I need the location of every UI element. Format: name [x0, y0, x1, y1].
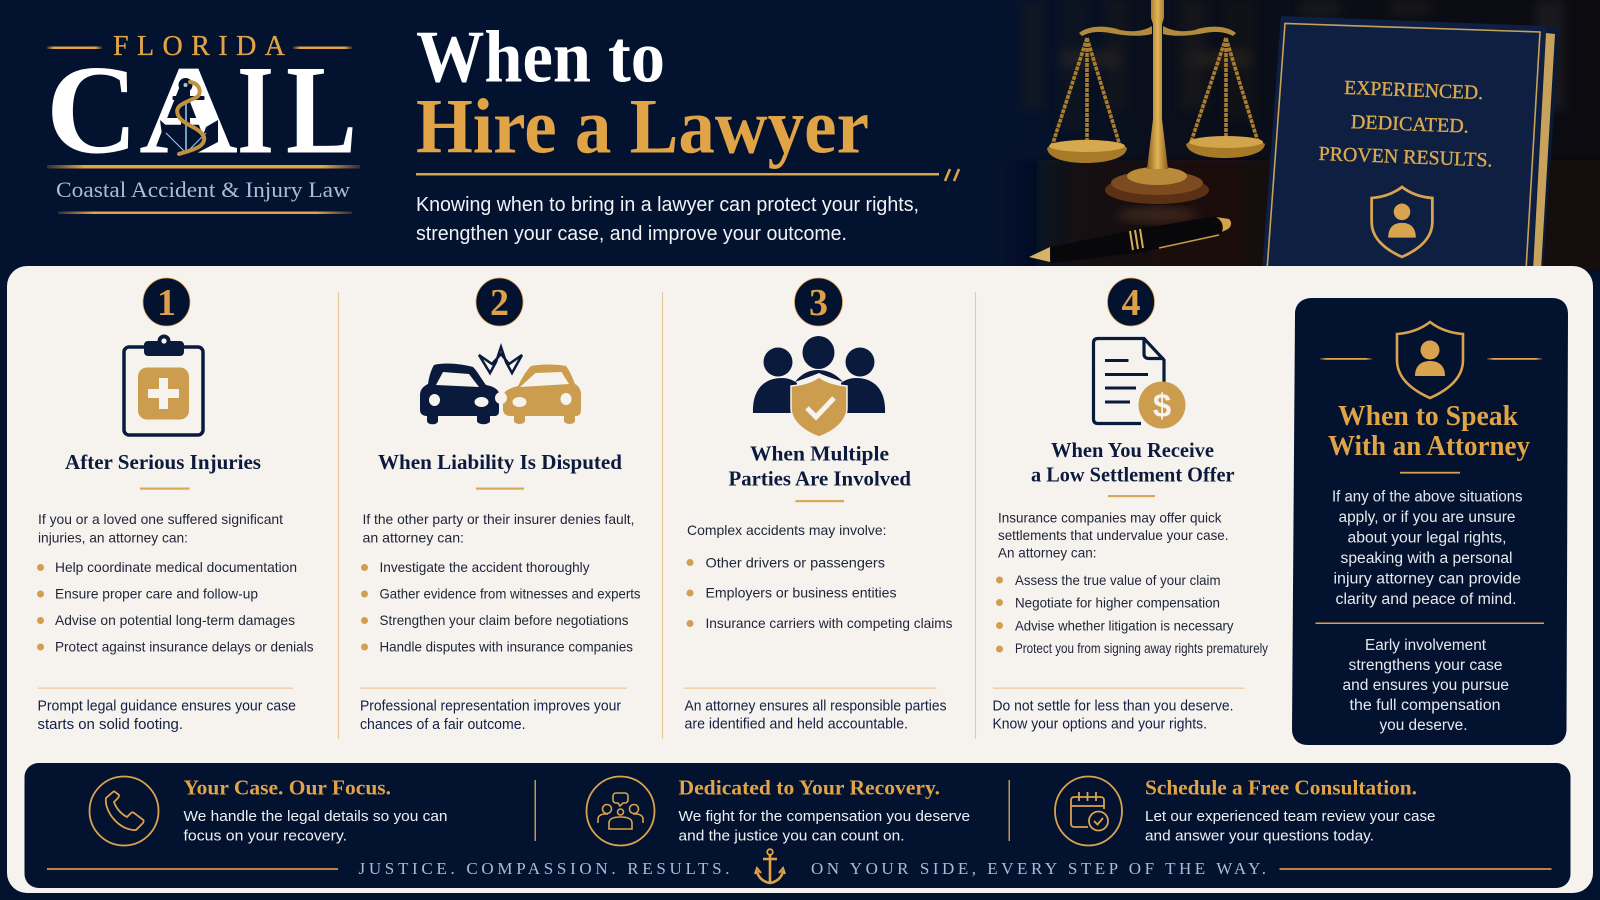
- heading: Parties Are Involved: [728, 466, 911, 490]
- icon: group of people: [586, 776, 654, 846]
- number badge 2: [476, 278, 523, 326]
- card closing paragraph: [1342, 637, 1509, 734]
- closing note: An attorney ensures all responsible parties: [684, 698, 946, 714]
- icon: anchor: [755, 849, 785, 883]
- card heading: When to Speak: [1338, 401, 1518, 432]
- card paragraph: apply, or if you are unsure: [1338, 509, 1516, 526]
- motto line: ON YOUR SIDE, EVERY STEP OF THE WAY.: [811, 859, 1266, 878]
- logo word: CAIL: [46, 40, 357, 180]
- closing note: starts on solid footing.: [38, 717, 183, 733]
- title rule with slashes: [416, 169, 959, 181]
- title: When to: [416, 16, 665, 98]
- icon: phone: [90, 776, 158, 846]
- card heading: With an Attorney: [1328, 431, 1530, 462]
- panel: low settlement offer: [992, 278, 1268, 732]
- closing note: Professional representation improves your: [360, 698, 621, 714]
- bullet list: [996, 572, 1268, 656]
- card paragraph: about your legal rights,: [1348, 530, 1506, 546]
- icon: two cars colliding: [420, 347, 581, 424]
- intro text: An attorney can:: [998, 544, 1096, 560]
- card heading: [1328, 401, 1530, 462]
- panel: multiple parties: [684, 278, 952, 732]
- number badge 1: [143, 278, 190, 326]
- panel: after serious injuries: [37, 278, 314, 733]
- logo word: CAIL: I: [237, 40, 274, 180]
- intro text: settlements that undervalue your case.: [998, 527, 1228, 543]
- feature: dedicated to your recovery: [586, 776, 970, 846]
- bullet list: Ensure proper care and follow-up: [55, 586, 258, 602]
- title: Hire a Lawyer: [416, 82, 869, 170]
- book cover text: PROVEN RESULTS.: [1318, 143, 1493, 172]
- feature: your case, our focus: focus on your recovery.: [184, 828, 347, 844]
- number badge 4: 4: [1122, 282, 1140, 324]
- header photo: scales of justice, pen and book: [960, 0, 1600, 270]
- icon: shield with person: [1397, 322, 1463, 398]
- bullet list: Gather evidence from witnesses and experts: [380, 586, 640, 602]
- feature: schedule a free consultation: and answer your questions today.: [1145, 828, 1374, 844]
- closing note: are identified and held accountable.: [684, 716, 908, 732]
- closing note: [992, 698, 1234, 732]
- bullet list: Investigate the accident thoroughly: [380, 559, 590, 575]
- feature: dedicated to your recovery: Dedicated to Your Recovery.: [678, 776, 940, 800]
- icon: fountain pen: [1029, 216, 1231, 263]
- heading: After Serious Injuries: [65, 450, 261, 474]
- number badge 1: 1: [157, 282, 176, 324]
- motto line: JUSTICE. COMPASSION. RESULTS.: [358, 859, 730, 878]
- intro text: [362, 511, 634, 546]
- bullet list: Protect you from signing away rights prematurely: [1015, 640, 1268, 656]
- logo word: CAIL: L: [286, 40, 357, 180]
- bullet list: [37, 559, 314, 654]
- title: [416, 16, 869, 170]
- closing note: [360, 698, 621, 733]
- feature: schedule a free consultation: [1055, 776, 1436, 846]
- card closing paragraph: Early involvement: [1365, 637, 1487, 654]
- heading: [1031, 438, 1234, 486]
- bullet list: [361, 559, 640, 654]
- number badge 3: 3: [809, 282, 828, 324]
- card paragraph: [1332, 488, 1523, 608]
- book: Experienced. Dedicated. Proven Results.: [1262, 16, 1559, 270]
- subtitle: [416, 194, 919, 245]
- heading: When Liability Is Disputed: [378, 450, 622, 474]
- closing note: Prompt legal guidance ensures your case: [38, 698, 296, 714]
- card paragraph: speaking with a personal: [1340, 550, 1512, 567]
- number badge 3: [794, 278, 842, 326]
- motto line: [47, 849, 1552, 883]
- card closing paragraph: you deserve.: [1380, 717, 1468, 734]
- heading: When Multiple: [750, 442, 889, 466]
- intro text: injuries, an attorney can:: [38, 530, 188, 546]
- icon: shield on book: [1372, 187, 1432, 257]
- feature: dedicated to your recovery: and the justice you can count on.: [678, 828, 904, 844]
- closing note: Do not settle for less than you deserve.: [992, 698, 1234, 714]
- main content panel: [7, 266, 1593, 893]
- logo word: CAIL: A: [139, 40, 238, 180]
- icon: calendar with check: [1055, 776, 1122, 846]
- closing note: chances of a fair outcome.: [360, 717, 526, 733]
- intro text: If you or a loved one suffered significant: [38, 511, 283, 527]
- intro text: Complex accidents may involve:: [687, 522, 886, 538]
- feature: dedicated to your recovery: We fight for the compensation you deserve: [678, 808, 970, 825]
- heading: a Low Settlement Offer: [1031, 462, 1234, 486]
- heading: When You Receive: [1051, 438, 1214, 462]
- icon: clipboard with medical cross: [124, 334, 203, 435]
- feature: schedule a free consultation: Let our experienced team review your case: [1145, 808, 1436, 825]
- bullet list: Employers or business entities: [706, 584, 896, 600]
- panel: liability disputed: [360, 278, 640, 733]
- book cover text: DEDICATED.: [1350, 111, 1469, 138]
- logo tagline: Coastal Accident & Injury Law: [56, 177, 350, 202]
- feature: schedule a free consultation: Schedule a Free Consultation.: [1145, 776, 1417, 800]
- intro text: [998, 510, 1228, 560]
- bottom bar: [24, 763, 1570, 888]
- bullet list: Negotiate for higher compensation: [1015, 594, 1220, 610]
- subtitle: strengthen your case, and improve your outcome.: [416, 223, 847, 245]
- card closing paragraph: and ensures you pursue: [1342, 677, 1509, 694]
- closing note: Know your options and your rights.: [992, 716, 1207, 732]
- subtitle: Knowing when to bring in a lawyer can protect your rights,: [416, 194, 919, 216]
- feature: your case, our focus: We handle the legal details so you can: [184, 808, 448, 825]
- logo word: CAIL: C: [46, 40, 138, 180]
- bullet list: Protect against insurance delays or denials: [55, 638, 314, 654]
- intro text: Insurance companies may offer quick: [998, 510, 1222, 526]
- logo: Florida Cail: [46, 31, 360, 214]
- card closing paragraph: strengthens your case: [1348, 657, 1502, 674]
- column dividers: [338, 292, 976, 739]
- icon: document with dollar coin: $: [1153, 387, 1171, 424]
- number badge 4: [1108, 278, 1154, 326]
- bullet list: Advise whether litigation is necessary: [1015, 618, 1234, 634]
- card paragraph: If any of the above situations: [1332, 488, 1523, 506]
- book cover text: EXPERIENCED.: [1344, 77, 1484, 104]
- card closing paragraph: the full compensation: [1350, 697, 1500, 714]
- card paragraph: clarity and peace of mind.: [1336, 591, 1516, 608]
- card paragraph: injury attorney can provide: [1334, 570, 1521, 588]
- bullet list: [686, 554, 952, 631]
- bullet list: Strengthen your claim before negotiations: [380, 612, 628, 628]
- icon: document with dollar coin: [1094, 338, 1186, 428]
- icon: anchor and rope: [160, 78, 218, 155]
- bullet list: Handle disputes with insurance companies: [380, 638, 633, 654]
- intro text: If the other party or their insurer denies fault,: [362, 511, 634, 527]
- intro text: an attorney can:: [362, 530, 464, 546]
- icon: three people with check shield: [753, 336, 885, 437]
- feature: your case, our focus: Your Case. Our Focus.: [184, 776, 391, 800]
- heading: [728, 442, 911, 490]
- bullet list: Help coordinate medical documentation: [55, 559, 297, 575]
- bullet list: Advise on potential long-term damages: [55, 612, 295, 628]
- closing note: [684, 698, 946, 732]
- logo word: Florida: FLORIDA: [113, 31, 286, 62]
- closing note: [38, 698, 296, 733]
- feature: your case, our focus: [90, 776, 448, 846]
- panel: when to speak with an attorney: [1292, 298, 1568, 745]
- bullet list: Other drivers or passengers: [706, 554, 885, 570]
- bullet list: Assess the true value of your claim: [1015, 572, 1220, 588]
- book cover text: [1318, 76, 1496, 172]
- bullet list: Insurance carriers with competing claims: [706, 615, 952, 631]
- intro text: [38, 511, 283, 546]
- number badge 2: 2: [490, 282, 509, 324]
- icon: balance scale: [1047, 0, 1265, 223]
